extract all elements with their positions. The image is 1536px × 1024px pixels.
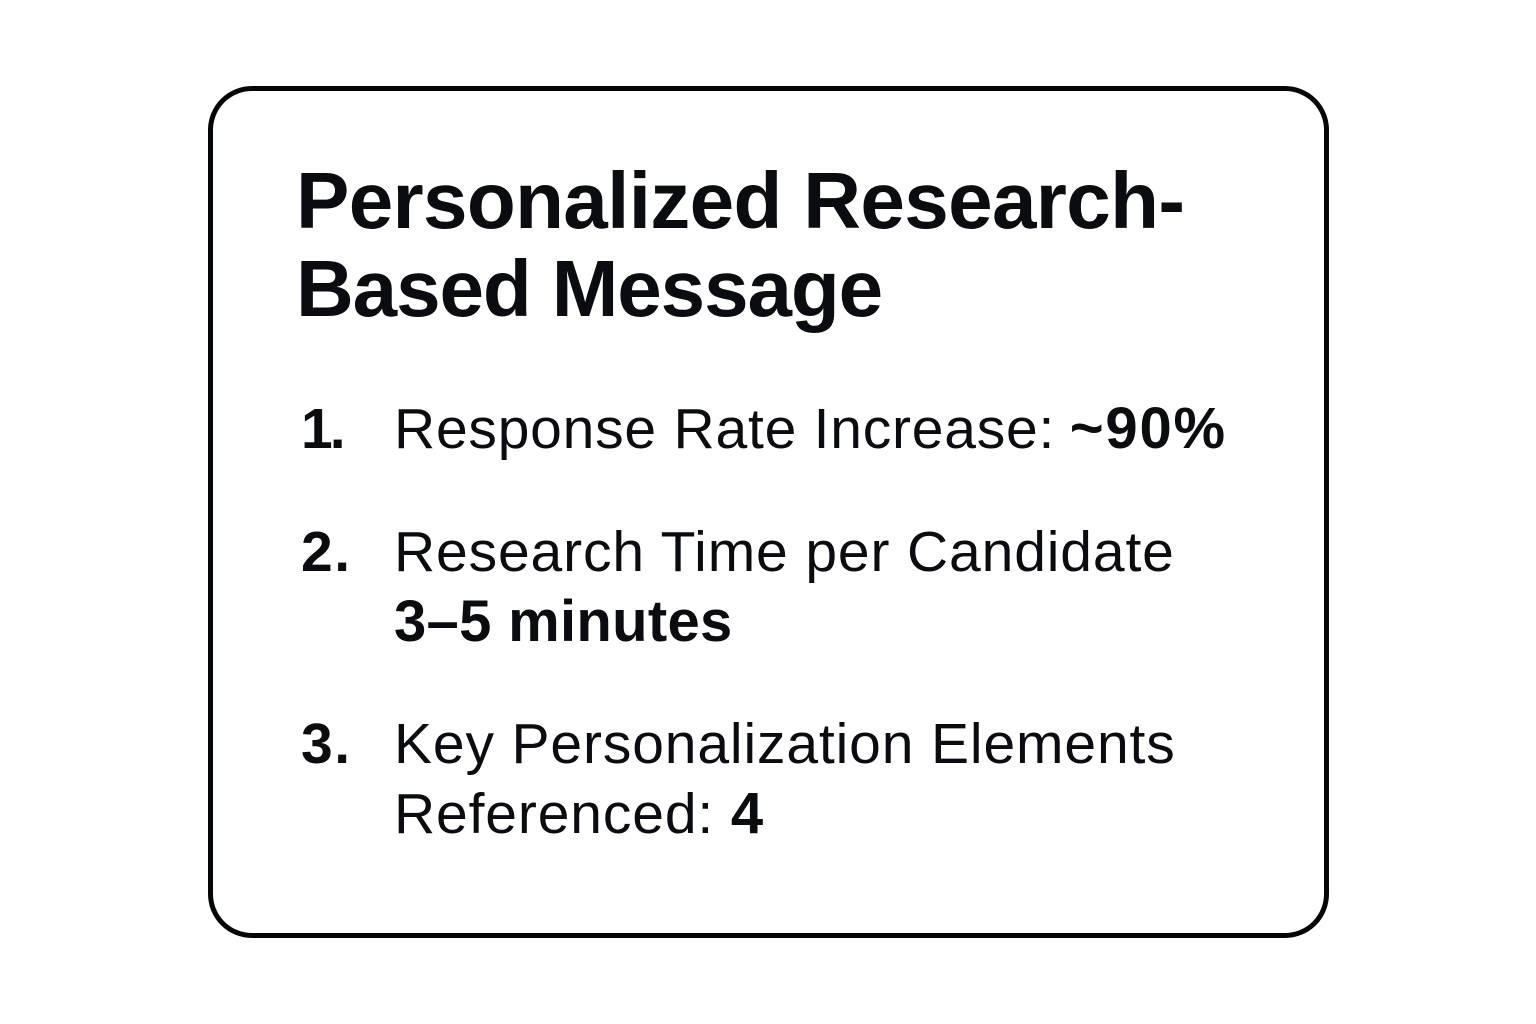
list item 1 text: Response Rate Increase: ~90% — [394, 396, 1227, 461]
title: Personalized Research- — [296, 156, 1184, 245]
list item 2 number: 2. — [301, 520, 352, 584]
list item 3 text: Referenced: 4 — [394, 781, 764, 846]
list item 2 text — [394, 520, 1175, 654]
list item 2 text: Research Time per Candidate — [394, 520, 1175, 584]
panel: message card — [208, 86, 1329, 938]
list item 3 text — [394, 712, 1176, 846]
list item 2 text: 3–5 minutes — [394, 589, 733, 654]
list item 3 text: Key Personalization Elements — [394, 712, 1176, 776]
list item 1 number: 1. — [301, 397, 343, 461]
title: Based Message — [296, 244, 882, 333]
list item 3 number: 3. — [301, 712, 352, 776]
title — [296, 156, 1184, 333]
